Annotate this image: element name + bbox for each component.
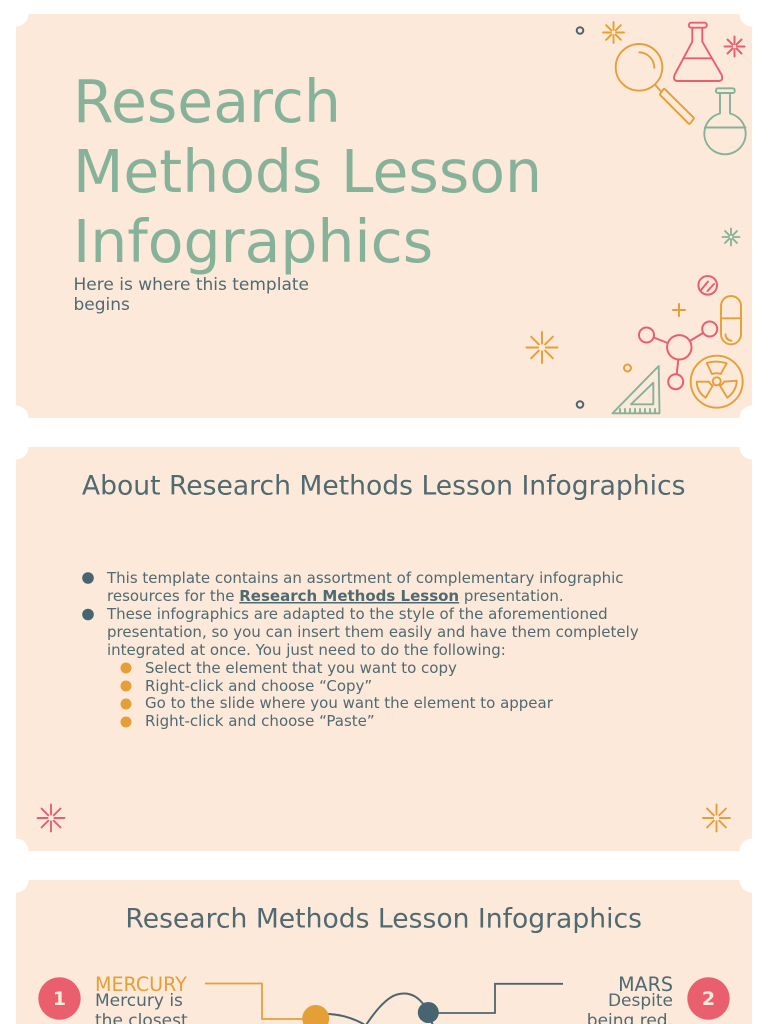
icon: small teal ring bottom: [577, 401, 583, 408]
title: [73, 68, 542, 276]
list text: These infographics are adapted to the style of the aforementioned: [106, 605, 608, 623]
icon: red molecule: [639, 322, 717, 389]
bullets: [82, 572, 132, 728]
node: teal: [418, 1002, 439, 1023]
list text: Go to the slide where you want the element to appear: [145, 694, 554, 712]
badge 2: [687, 977, 730, 1020]
icon: orange capsule: [721, 296, 741, 344]
badge 1: [38, 977, 81, 1020]
icon: small orange ring: [624, 364, 631, 372]
list text: Right-click and choose “Paste”: [145, 712, 375, 730]
list text: Right-click and choose “Copy”: [145, 677, 372, 695]
list text: resources for the Research Methods Lesson presentation.: [107, 587, 564, 605]
list text: This template contains an assortment of complementary infographic: [106, 569, 624, 587]
heading: about: About Research Methods Lesson Infographics: [82, 470, 686, 502]
text: mercury: [95, 973, 188, 1024]
badge 2: 2: [702, 988, 715, 1010]
icon: green star: [722, 228, 740, 246]
title: Research: [73, 68, 341, 136]
title: Infographics: [73, 208, 433, 276]
icon: orange star bottom: [703, 804, 730, 832]
subtitle: Here is where this template: [74, 275, 309, 295]
list text: Select the element that you want to copy: [145, 659, 457, 677]
list text: presentation, so you can insert them easily and have them completely: [107, 623, 639, 641]
icon: large orange star: [526, 332, 558, 363]
list text: [106, 569, 639, 730]
connector: mars: [438, 984, 563, 1013]
panel: about slide: [16, 447, 752, 851]
subtitle: begins: [74, 295, 130, 315]
icon: orange star top: [603, 22, 624, 43]
text: mars: MARS: [618, 973, 673, 996]
node: orange: [302, 1005, 329, 1024]
bulleted list: [82, 569, 639, 730]
connector: mercury: [205, 984, 303, 1019]
heading: infographic: Research Methods Lesson Infographics: [125, 904, 642, 934]
icon: red pill: [698, 276, 717, 295]
icon: red conical flask: [674, 23, 722, 81]
text: mercury: Mercury is: [95, 991, 183, 1011]
subtitle: [74, 275, 309, 315]
icon: green round flask: [704, 88, 746, 154]
title: Methods Lesson: [73, 138, 542, 206]
text: mars: [587, 973, 673, 1024]
icon: green set square: [612, 366, 660, 413]
list text: integrated at once. You just need to do the following:: [107, 641, 506, 659]
text: mercury: MERCURY: [95, 973, 187, 996]
icon: orange plus: [673, 304, 685, 316]
icon: small teal ring top: [577, 27, 583, 34]
badge 1: 1: [53, 988, 66, 1010]
panel: infographic slide: [16, 880, 752, 1024]
icon: radiation symbol: [691, 356, 743, 408]
icon: red star top: [724, 36, 744, 56]
text: mars: Despite: [608, 991, 673, 1011]
panel: title slide: [16, 14, 752, 418]
diagram curves: [329, 993, 433, 1024]
icon: magnifying glass: [616, 44, 694, 124]
icon: red star bottom: [38, 804, 64, 832]
